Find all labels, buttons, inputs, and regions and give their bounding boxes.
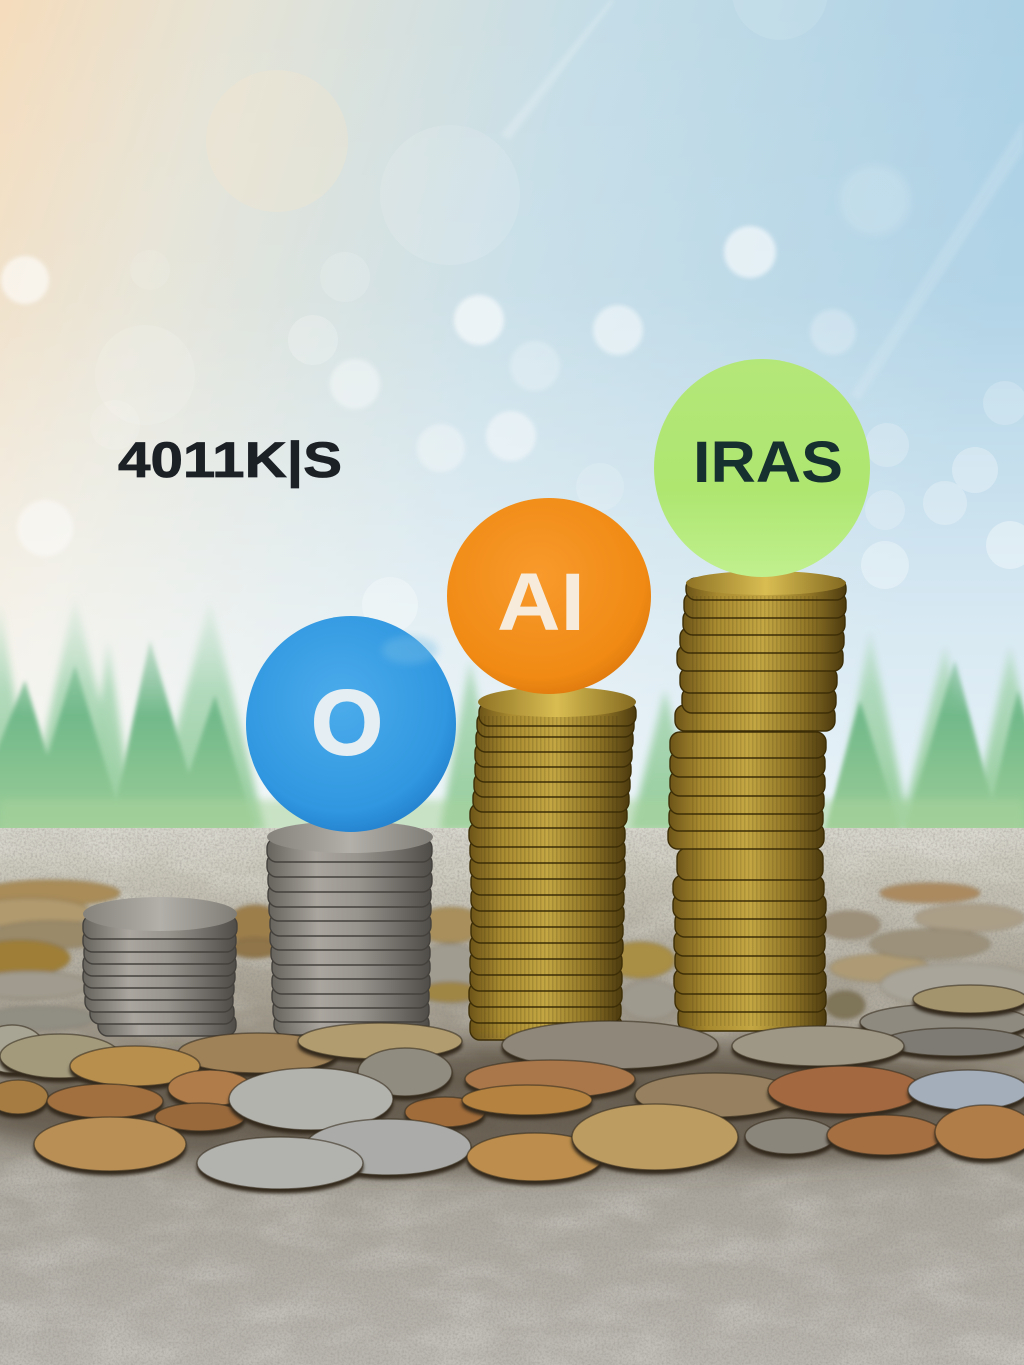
- background coin scatter: [0, 880, 1024, 1030]
- bokeh lights: [1, 0, 1024, 633]
- floating label: 4011K|S: [118, 432, 342, 489]
- orange ball with letters AI: AI: [497, 557, 585, 648]
- green ball with letters IRAS: [654, 359, 870, 577]
- gold coin stack under orange ball: [469, 687, 636, 1040]
- sky background: [0, 0, 1024, 840]
- foreground coin pile: [0, 985, 1024, 1189]
- blue ball with letter O: [246, 616, 456, 832]
- green ball with letters IRAS: IRAS: [693, 430, 843, 495]
- gold coin stack under green ball: [668, 571, 846, 1031]
- blue ball with letter O: O: [311, 672, 383, 774]
- silver coin stack under blue ball: [267, 821, 433, 1035]
- coin pile shadow: [0, 1048, 1024, 1172]
- stone tabletop: [0, 828, 1024, 1365]
- small silver coin stack: [83, 897, 237, 1036]
- orange ball with letters AI: [447, 498, 651, 694]
- forest backdrop: [0, 595, 1024, 836]
